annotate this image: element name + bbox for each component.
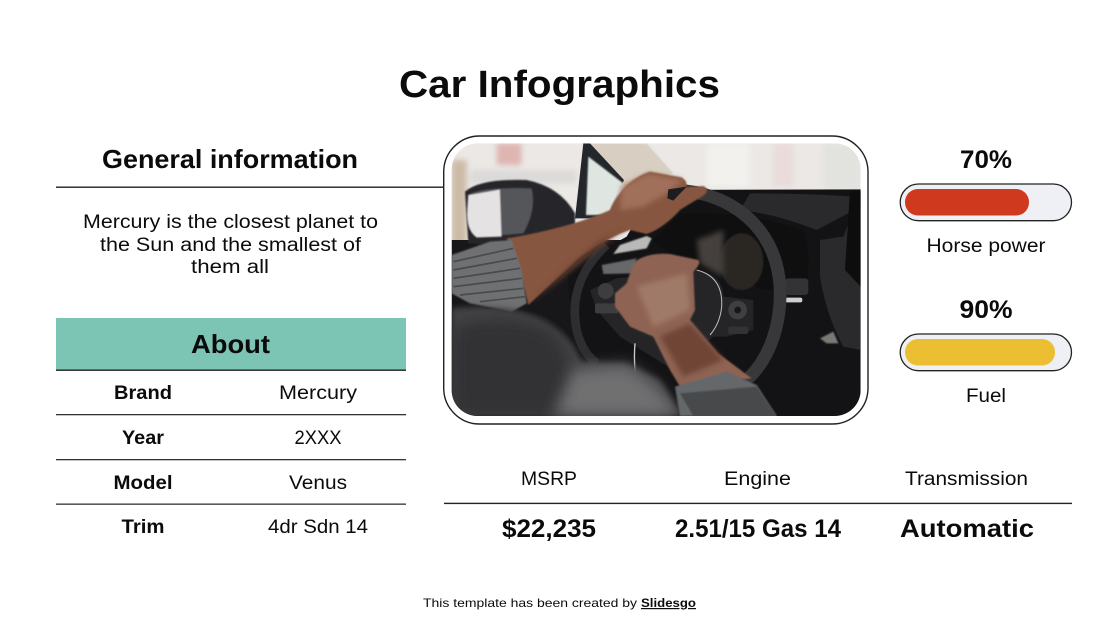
text block: description: Mercury is the closest planet to	[83, 212, 378, 233]
progress bar: 70%	[900, 184, 1072, 221]
footer credit	[423, 596, 696, 610]
spec: transmission: Transmission	[905, 469, 1028, 490]
dashboard	[620, 189, 861, 416]
row: year: 2XXX	[294, 428, 342, 449]
spec: MSRP: $22,235	[502, 515, 596, 543]
shoulder and back	[452, 307, 682, 416]
center console left of wheel	[613, 236, 652, 254]
upper arm and hand	[507, 172, 707, 305]
value: 70%: 70%	[960, 146, 1012, 174]
panel: general information	[56, 144, 444, 278]
spec: transmission	[900, 469, 1034, 543]
table header: About	[191, 329, 270, 359]
row: year	[122, 428, 342, 449]
label: horse power: Horse power	[926, 236, 1046, 257]
dark base below the mirror line	[452, 240, 654, 416]
spec: MSRP	[502, 469, 596, 543]
spec: engine: Engine	[724, 469, 791, 490]
footer credit: This template has been created by	[423, 596, 637, 610]
label: fuel: Fuel	[966, 386, 1006, 407]
wheel hub	[590, 270, 753, 370]
table header	[56, 318, 406, 370]
row: model	[114, 473, 347, 494]
progress bar: 90%	[900, 334, 1072, 371]
photo frame: hands on steering wheel	[444, 136, 868, 424]
row: brand	[114, 383, 358, 404]
row: model: Venus	[289, 473, 347, 494]
text block: description: the Sun and the smallest of	[100, 235, 362, 256]
footer credit: Slidesgo	[641, 596, 696, 610]
heading rule connecting to photo	[56, 186, 444, 188]
spec: transmission: Automatic	[900, 515, 1034, 543]
shirt cuff lower	[675, 372, 777, 416]
row: brand: Brand	[114, 383, 172, 404]
lower hand and forearm	[615, 254, 752, 387]
row: year: Year	[122, 428, 165, 449]
spec: engine	[675, 469, 841, 543]
gauge: horse power	[900, 146, 1072, 257]
steering wheel rim	[673, 190, 780, 377]
text block: description: them all	[191, 257, 269, 278]
row: trim	[122, 517, 368, 538]
spec: engine: 2.51/15 Gas 14	[675, 515, 841, 543]
panel: about table	[56, 318, 406, 538]
checked sleeve	[452, 240, 527, 312]
gauge: fuel	[900, 296, 1072, 407]
windshield pillar	[582, 143, 673, 187]
row: brand: Mercury	[279, 383, 358, 404]
text block: description	[83, 212, 378, 278]
row: model: Model	[114, 473, 172, 494]
value: 90%: 90%	[960, 296, 1012, 324]
row: trim: 4dr Sdn 14	[268, 517, 368, 538]
spec: MSRP: MSRP	[521, 469, 577, 490]
mirror	[465, 180, 575, 245]
title: Car Infographics	[399, 64, 720, 106]
heading: general information: General information	[102, 144, 358, 174]
row: trim: Trim	[122, 517, 164, 538]
panel: specifications	[444, 469, 1072, 543]
